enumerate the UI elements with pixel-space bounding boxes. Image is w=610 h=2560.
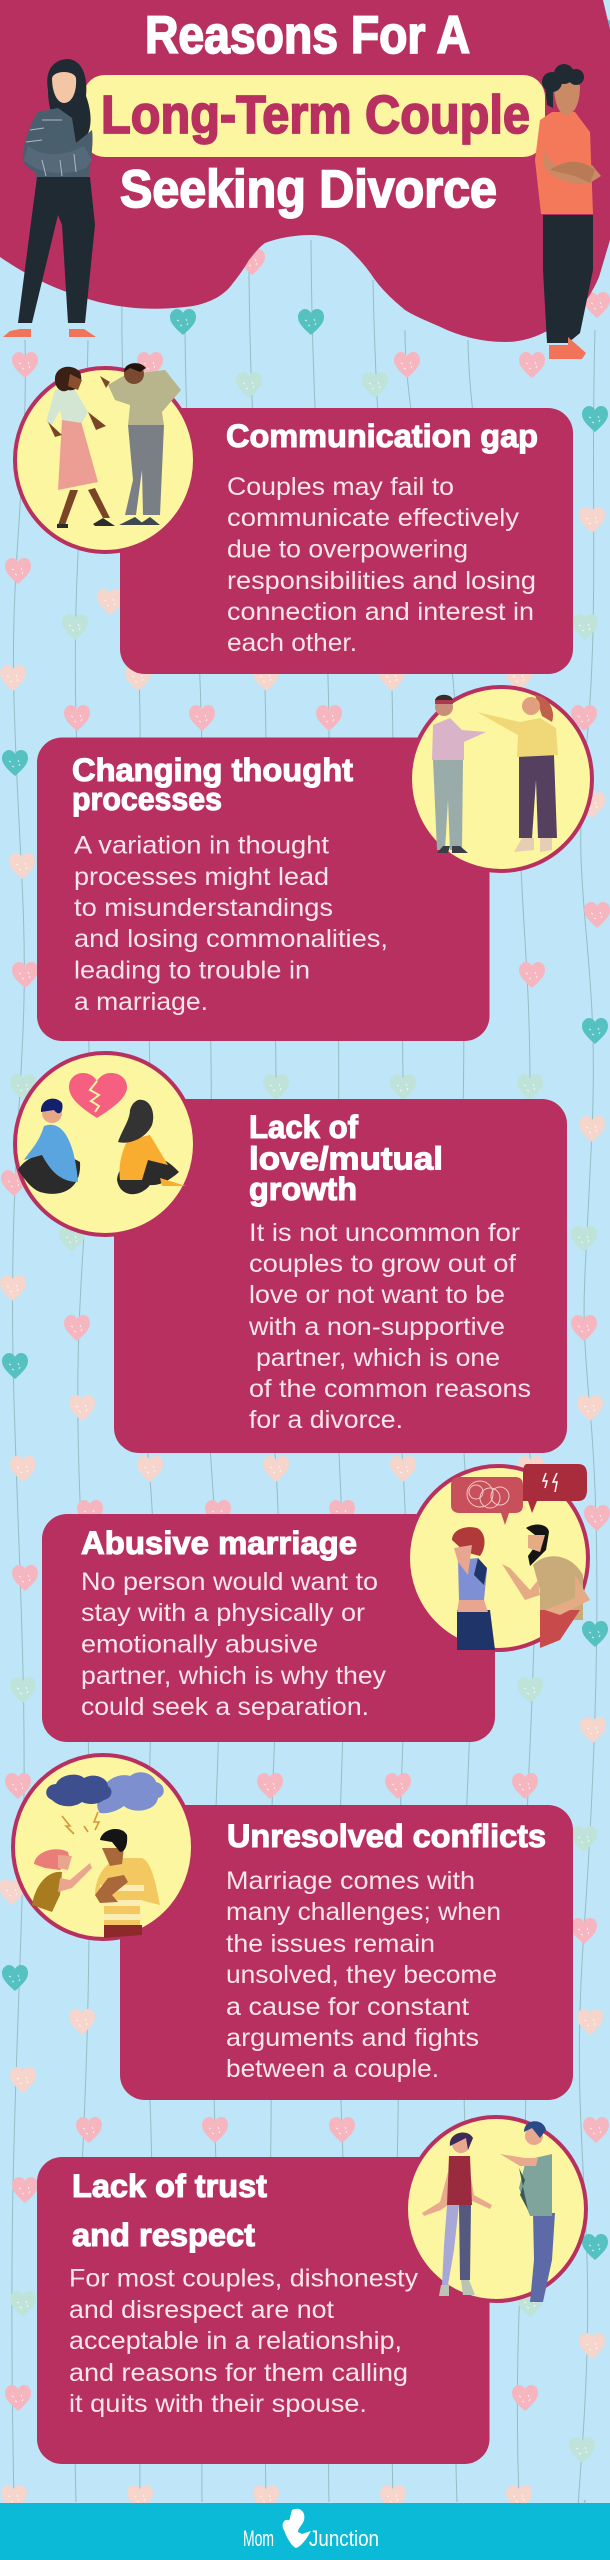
title line 1: Reasons For A <box>145 6 470 65</box>
card heading <box>249 1109 443 1207</box>
speech bubble: tangled thoughts <box>451 1477 523 1525</box>
panel: lack of trust and respect <box>37 2117 586 2464</box>
icon: broken heart <box>69 1073 127 1118</box>
card body: Marriage comes with <box>226 1867 475 1895</box>
card body: and losing commonalities, <box>74 925 388 953</box>
card body: a marriage. <box>74 988 208 1016</box>
card body: acceptable in a relationship, <box>69 2327 402 2355</box>
header blob <box>0 0 610 342</box>
card heading: love/mutual <box>249 1140 443 1176</box>
card body: couples to grow out of <box>249 1250 516 1278</box>
logo: MomJunction: Junction <box>309 2526 379 2551</box>
card body <box>226 1867 501 2083</box>
panel: communication gap <box>15 363 573 674</box>
card body: of the common reasons <box>249 1375 531 1403</box>
card body: partner, which is why they <box>81 1662 387 1690</box>
card heading: growth <box>249 1171 357 1207</box>
card body: It is not uncommon for <box>249 1219 520 1247</box>
card body: it quits with their spouse. <box>69 2390 367 2418</box>
panel: abusive marriage <box>42 1464 590 1742</box>
card body: Couples may fail to <box>227 473 454 501</box>
card body: for a divorce. <box>249 1406 403 1434</box>
panel: changing thought processes <box>37 687 592 1041</box>
card body: arguments and fights <box>226 2024 479 2052</box>
card body: with a non-supportive <box>248 1313 505 1341</box>
card body: due to overpowering <box>227 536 468 564</box>
yellow title banner <box>83 75 545 157</box>
card body: processes might lead <box>74 863 329 891</box>
card heading: processes <box>72 781 222 817</box>
card body: connection and interest in <box>227 598 534 626</box>
card heading: Abusive marriage <box>81 1525 357 1561</box>
card body: unsolved, they become <box>226 1961 497 1989</box>
logo: MomJunction: Mom <box>243 2526 274 2551</box>
card body: could seek a separation. <box>81 1693 369 1721</box>
card body <box>69 2264 419 2418</box>
card body: love or not want to be <box>249 1281 505 1309</box>
card body: and disrespect are not <box>69 2296 334 2324</box>
card body: the issues remain <box>226 1930 435 1958</box>
illustration circle: man shouting at woman <box>408 1464 590 1650</box>
card heading: Communication gap <box>226 418 538 454</box>
card heading: Lack of trust <box>72 2168 267 2204</box>
illustration circle: arguing couple under clouds <box>13 1755 193 1939</box>
illustration: man with crossed arms <box>535 64 601 359</box>
speech bubble: lightning <box>523 1464 587 1513</box>
card body: partner, which is one <box>256 1344 500 1372</box>
card body <box>227 473 536 657</box>
card heading: Changing thought <box>72 752 353 788</box>
card body <box>81 1568 387 1721</box>
icon: storm clouds <box>46 1772 164 1834</box>
card body: to misunderstandings <box>74 894 333 922</box>
panel: unresolved conflicts <box>13 1755 573 2100</box>
card body: No person would want to <box>81 1568 378 1596</box>
card body: stay with a physically or <box>81 1599 365 1627</box>
card body: communicate effectively <box>227 504 520 532</box>
panel: lack of love/mutual growth <box>15 1053 567 1453</box>
card body <box>248 1219 531 1434</box>
illustration circle: couple back to back with broken heart <box>15 1053 195 1235</box>
card heading: Lack of <box>249 1109 358 1145</box>
card body: emotionally abusive <box>81 1630 318 1658</box>
card body: between a couple. <box>226 2055 439 2083</box>
card body: A variation in thought <box>74 832 329 860</box>
card body: many challenges; when <box>226 1898 501 1926</box>
illustration: woman with crossed arms <box>3 59 96 337</box>
card heading <box>72 752 353 817</box>
card body: leading to trouble in <box>74 957 310 985</box>
title line 3: Seeking Divorce <box>120 160 497 219</box>
illustration circle: arguing couple <box>15 363 195 552</box>
card heading <box>72 2168 267 2253</box>
logo: MomJunction <box>243 2509 379 2551</box>
card body <box>74 832 388 1016</box>
title line 2: Long-Term Couple <box>101 85 530 145</box>
illustration circle: couple pointing <box>410 687 592 871</box>
illustration circle: couple confronting <box>406 2117 586 2302</box>
card heading: and respect <box>72 2217 255 2253</box>
card body: a cause for constant <box>226 1993 469 2021</box>
card body: For most couples, dishonesty <box>69 2264 419 2292</box>
footer band <box>0 2503 610 2560</box>
card body: and reasons for them calling <box>69 2359 408 2387</box>
card body: each other. <box>227 629 357 657</box>
card heading: Unresolved conflicts <box>227 1818 546 1854</box>
card body: responsibilities and losing <box>227 567 536 595</box>
